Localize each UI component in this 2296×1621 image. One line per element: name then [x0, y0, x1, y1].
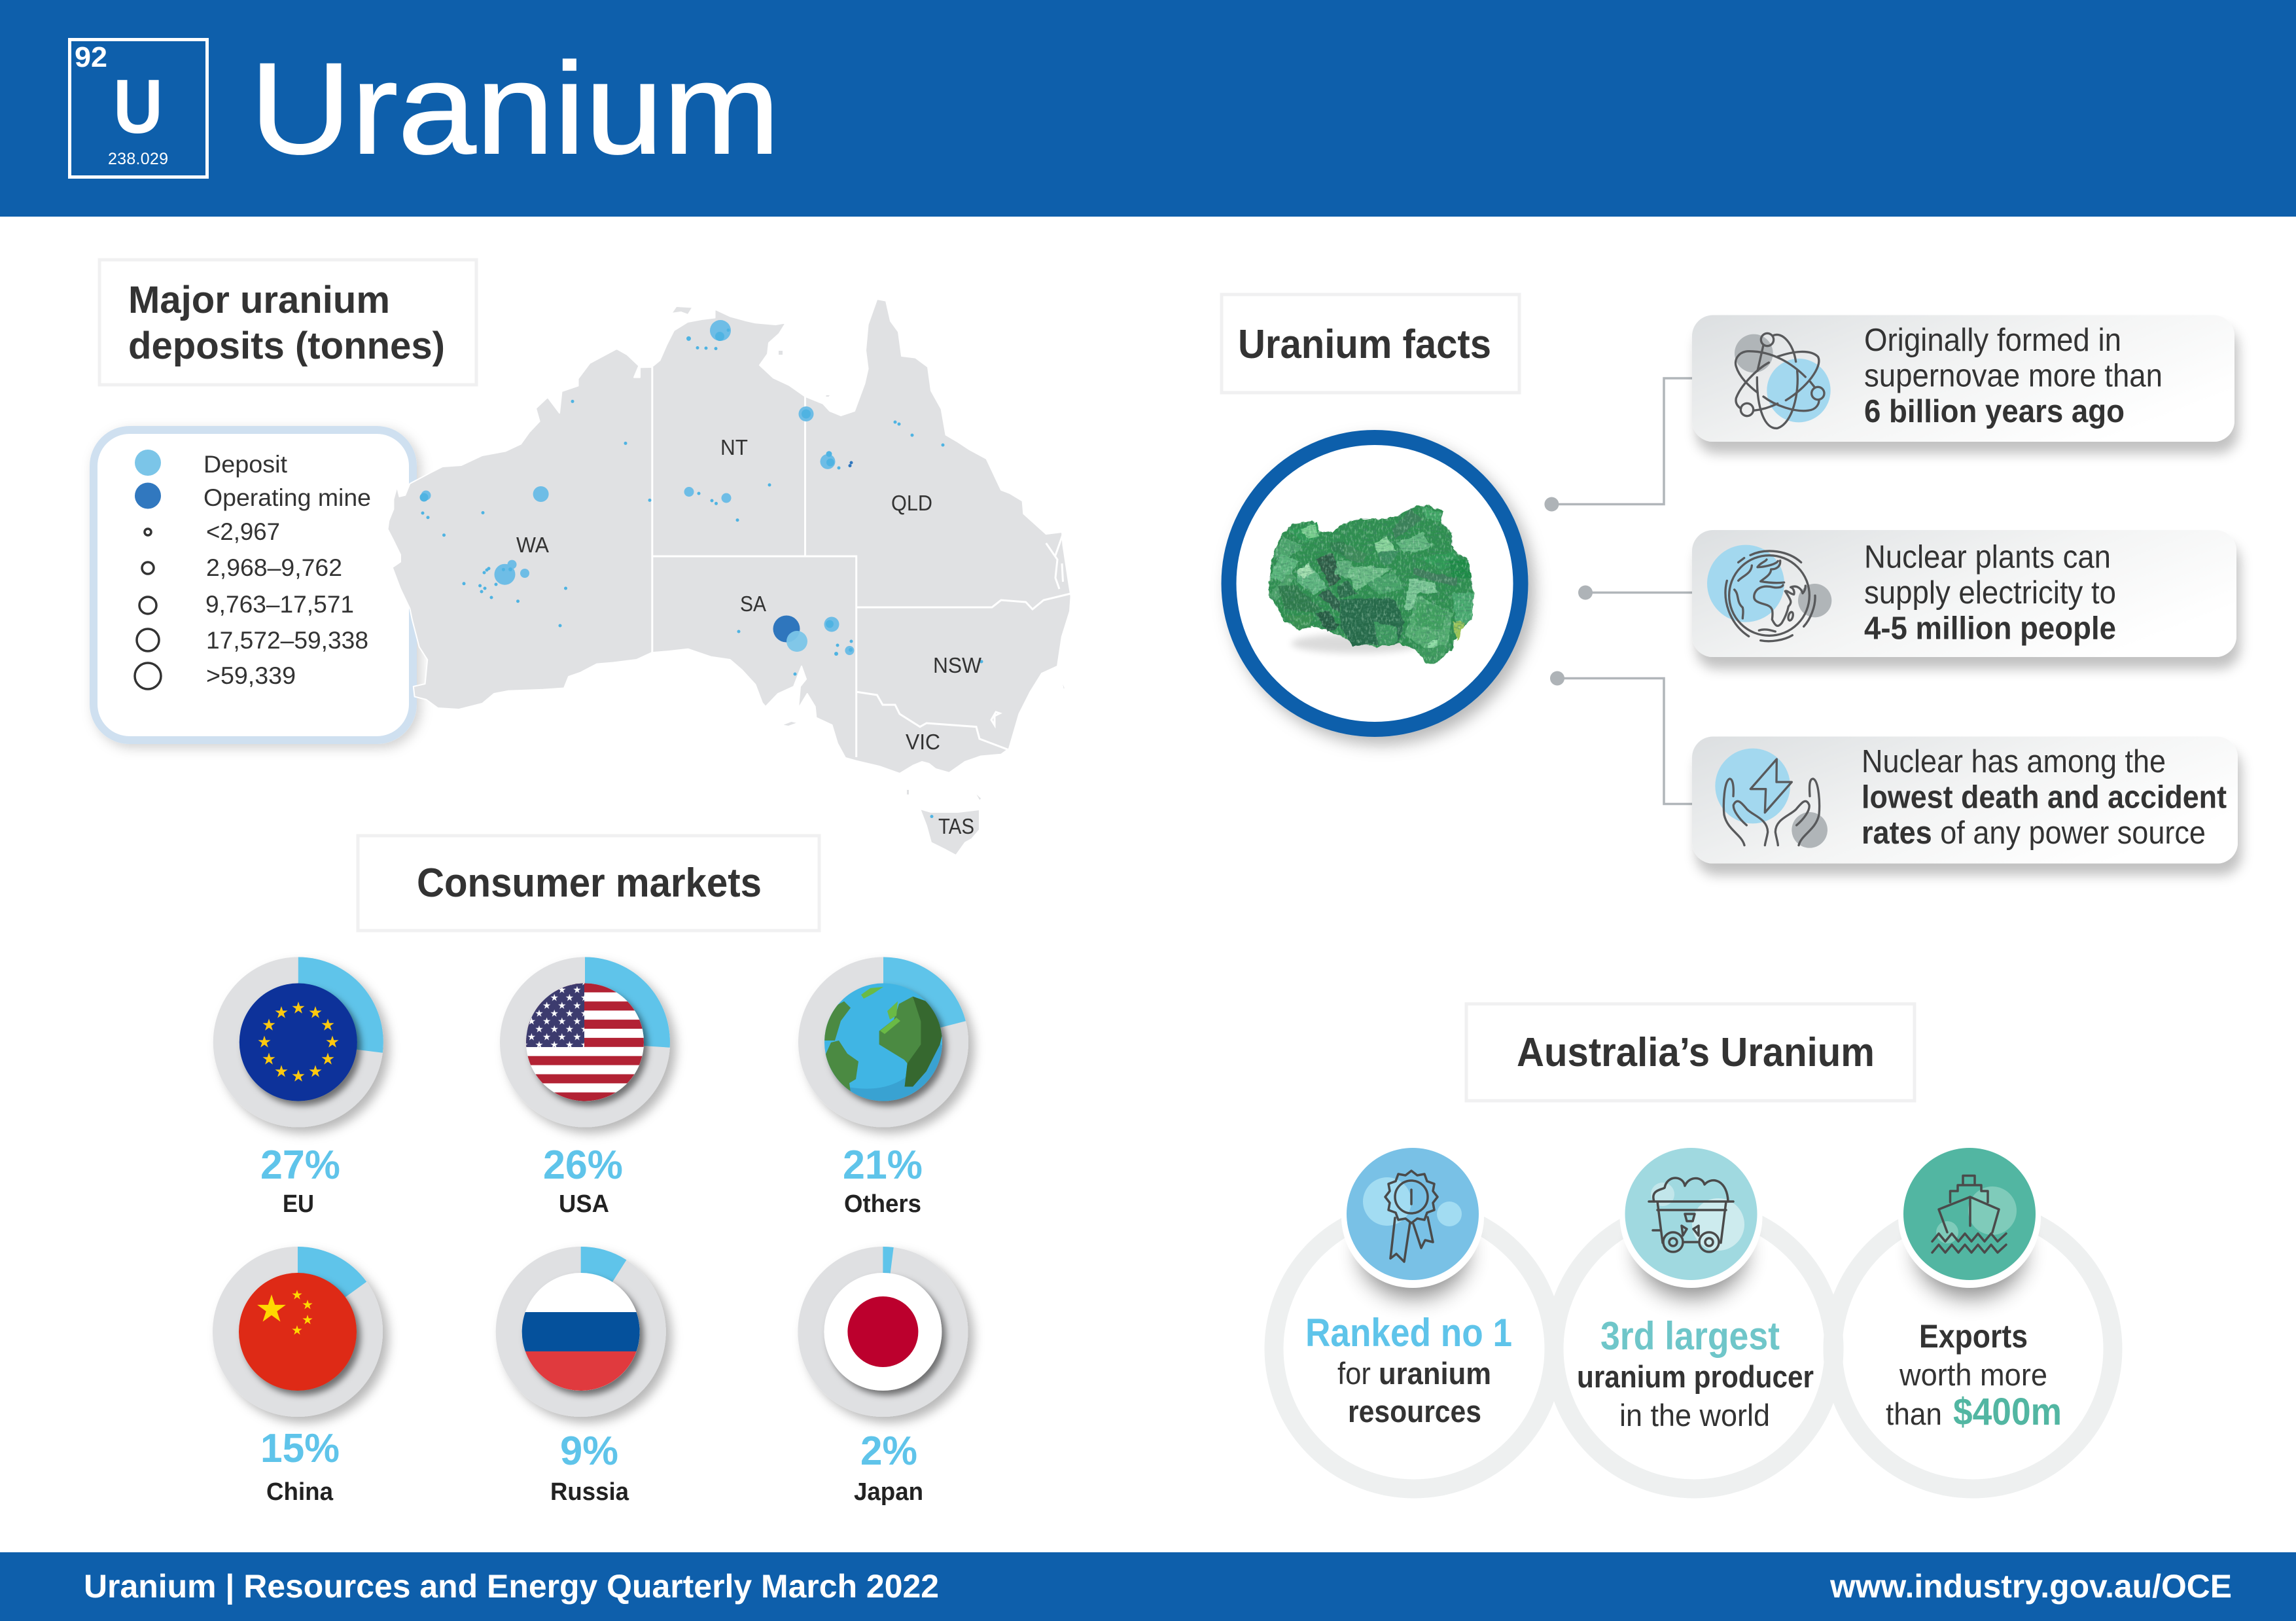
state labels: NSW	[933, 653, 982, 677]
legend panel: 9,763–17,571	[205, 591, 354, 618]
donut: EU 27%: 27%	[260, 1143, 340, 1188]
stat: exports	[1886, 1145, 2062, 1433]
deposit dots	[420, 320, 983, 818]
icon: ship	[1932, 1175, 2017, 1253]
fact card: safety: Nuclear has among the	[1862, 744, 2166, 779]
legend panel: 2,968–9,762	[206, 554, 342, 581]
stat: exports: worth more	[1899, 1357, 2047, 1392]
heading: uranium facts	[1222, 294, 1519, 393]
donut: USA 26%	[500, 957, 670, 1218]
state labels: SA	[740, 592, 766, 616]
stat: 3rd largest: in the world	[1619, 1398, 1770, 1433]
stat: 3rd largest: 3rd largest	[1600, 1314, 1780, 1358]
donut: Russia 9%: 9%	[560, 1429, 618, 1474]
fact card: electricity	[1692, 530, 2236, 657]
icon: green uranium mineral rock	[1268, 505, 1474, 663]
donut: China 15%: China	[266, 1478, 334, 1506]
icon: ribbon award	[1363, 1171, 1462, 1262]
donut: Russia 9%	[496, 1247, 666, 1506]
state labels: TAS	[938, 814, 974, 838]
fact card: electricity: 4-5 million people	[1864, 611, 2116, 647]
fact card: electricity: Nuclear plants can	[1864, 539, 2111, 575]
fact card: supernovae: supernovae more than	[1864, 359, 2163, 394]
stat: ranked no 1: Ranked no 1	[1305, 1311, 1512, 1355]
legend panel: 17,572–59,338	[206, 627, 368, 654]
stat: 3rd largest: uranium producer	[1577, 1359, 1814, 1394]
fact card: supernovae	[1692, 315, 2234, 442]
donut: China 15%: 15%	[260, 1426, 340, 1471]
heading: major uranium deposits: deposits (tonnes)	[128, 325, 445, 367]
legend panel: Deposit	[203, 451, 288, 478]
fact card: safety: rates of any power source	[1862, 815, 2206, 851]
ring group: rankings	[1274, 1209, 2113, 1489]
footer banner: Uranium | Resources and Energy Quarterly March 2022	[84, 1568, 939, 1605]
legend panel: >59,339	[206, 662, 296, 689]
stat: 3rd largest	[1577, 1145, 1814, 1433]
stat: exports: Exports	[1919, 1318, 2028, 1355]
fact card: safety: lowest death and accident	[1862, 780, 2227, 815]
footer banner	[0, 1552, 2296, 1621]
donut: Russia 9%: Russia	[550, 1478, 629, 1506]
heading: major uranium deposits: Major uranium	[128, 279, 390, 321]
fact card: electricity: supply electricity to	[1864, 575, 2116, 611]
stat: ranked no 1	[1305, 1145, 1512, 1429]
heading: consumer markets: Consumer markets	[417, 861, 762, 906]
footer banner: www.industry.gov.au/OCE	[1829, 1568, 2232, 1605]
state labels: QLD	[891, 491, 932, 515]
stat: ranked no 1: resources	[1348, 1394, 1481, 1429]
state labels: VIC	[906, 730, 940, 754]
donut: China 15%	[213, 1247, 383, 1506]
donut: EU 27%: EU	[283, 1190, 314, 1218]
legend panel: Operating mine	[203, 484, 371, 511]
stat: exports: than	[1886, 1397, 1942, 1431]
stat: exports: $400m	[1953, 1391, 2062, 1433]
legend panel	[94, 430, 413, 740]
uranium mineral circle	[1229, 437, 1521, 729]
donut: Japan 2%	[798, 1247, 968, 1506]
donut: USA 26%: 26%	[543, 1143, 623, 1188]
state labels	[516, 435, 982, 838]
heading: consumer markets	[358, 836, 819, 931]
donut: Japan 2%: 2%	[860, 1429, 917, 1474]
icon: globe	[1707, 545, 1831, 641]
periodic table element box: 92	[75, 41, 107, 73]
icon: mine cart	[1649, 1178, 1744, 1252]
state labels: WA	[516, 533, 549, 557]
donut: Japan 2%: Japan	[854, 1478, 923, 1506]
heading: Australia's uranium	[1466, 1004, 1915, 1101]
stat: ranked no 1: for uranium	[1337, 1356, 1491, 1391]
title: Uranium	[250, 36, 780, 181]
periodic table element box	[69, 39, 207, 177]
icon: atom	[1735, 333, 1831, 428]
header banner	[0, 0, 2296, 217]
heading: uranium facts: Uranium facts	[1238, 322, 1491, 367]
donut: Others 21%: Others	[844, 1190, 921, 1218]
fact card: supernovae: Originally formed in	[1864, 323, 2121, 358]
fact card: supernovae: 6 billion years ago	[1864, 394, 2125, 429]
periodic table element box: 238.029	[108, 150, 168, 168]
donut: Others 21%	[798, 957, 968, 1218]
donut: EU 27%	[213, 957, 383, 1218]
fact card: safety	[1692, 737, 2238, 864]
heading: major uranium deposits	[99, 260, 476, 385]
connector lines	[1544, 378, 1692, 804]
heading: Australia's uranium: Australia’s Uranium	[1517, 1030, 1875, 1075]
donut: USA 26%: USA	[559, 1190, 609, 1218]
map of Australia with deposits	[387, 299, 1071, 855]
donut: Others 21%: 21%	[843, 1143, 923, 1188]
periodic table element box: U	[113, 63, 163, 149]
state labels: NT	[720, 435, 748, 459]
icon: hands holding lightning bolt	[1715, 749, 1828, 848]
legend panel: <2,967	[206, 518, 280, 545]
